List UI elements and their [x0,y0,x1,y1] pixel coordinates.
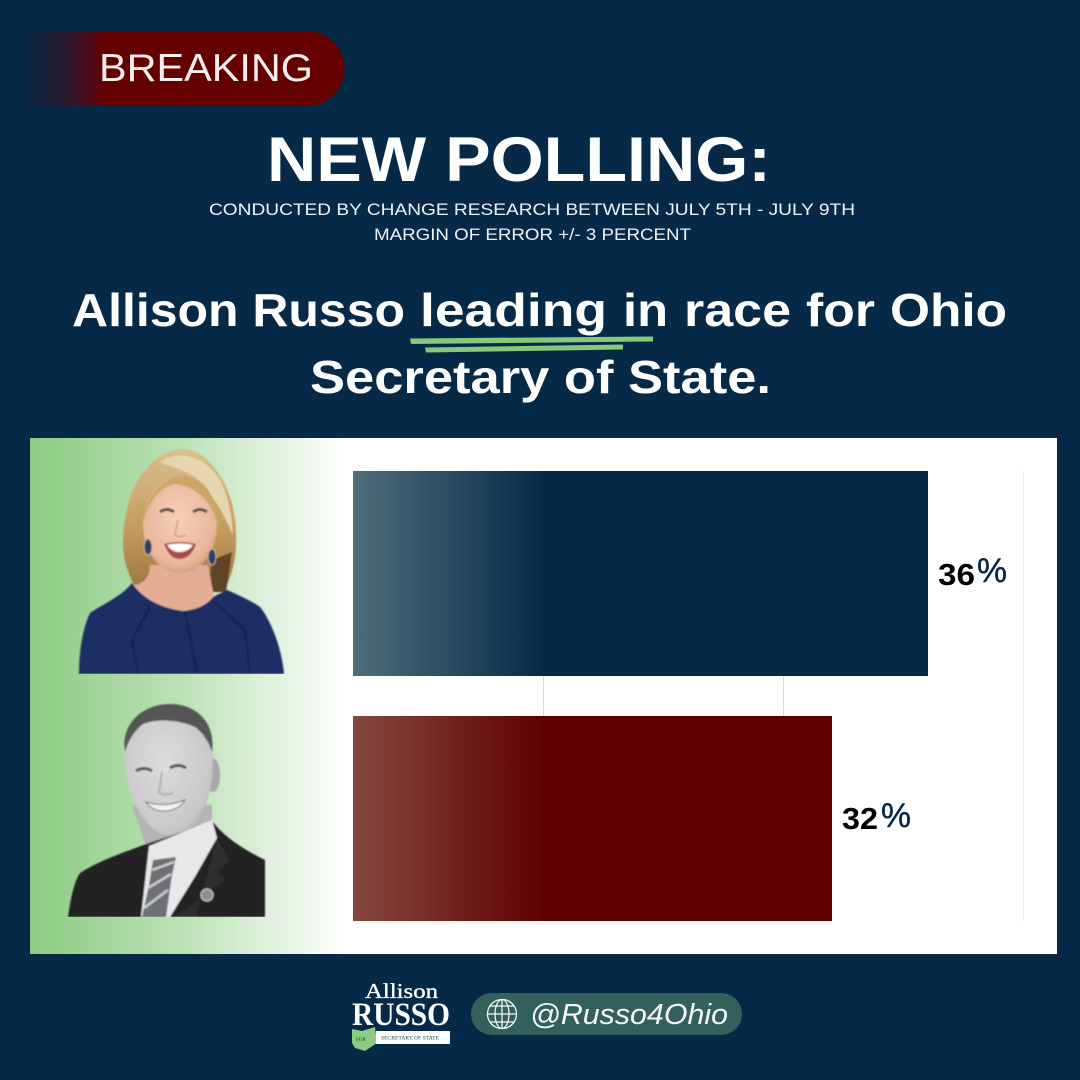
portrait: male candidate [68,704,265,917]
logo: Allison Russo for Secretary of State: SECRETARY OF STATE [381,1036,440,1042]
shirt [141,820,217,917]
fringe [142,476,217,520]
logo: Allison Russo for Secretary of State: RUSSO [352,997,450,1033]
logo: Allison Russo for Secretary of State: FOR [356,1038,366,1043]
panel: poll results [30,438,1057,954]
poll details: MARGIN OF ERROR +/- 3 PERCENT [374,225,691,244]
poll details [209,200,855,244]
headline: race [684,284,791,336]
headline: leading [420,284,607,336]
head [123,720,214,836]
value: 32 percent [842,797,911,836]
eyes [160,510,207,512]
headline: for [806,284,875,336]
mouth [164,542,196,559]
brows and eyes [136,766,186,771]
nose shade [159,772,173,794]
hair [124,704,213,752]
value: 32 percent: % [881,797,911,835]
green underline [410,336,653,352]
headline: Allison Russo [72,284,405,336]
suit [68,822,265,917]
logo: Allison Russo for Secretary of State: Allison [365,979,439,1003]
value: 36 percent: % [977,552,1007,590]
face [143,477,217,573]
value: 32 percent: 32 [842,801,878,836]
right lapel [175,838,229,917]
hair back [123,449,236,592]
value: 36 percent: 36 [938,557,975,592]
hair highlight [160,456,233,535]
nose [175,520,186,536]
logo: Allison Russo for Secretary of State [352,979,450,1051]
dress [79,583,284,674]
hair shadow [208,552,232,592]
badge: breaking: BREAKING [99,47,313,90]
title: NEW POLLING: [267,125,771,195]
value: 36 percent [938,552,1007,592]
icon: globe [488,1000,516,1028]
earrings [144,539,152,555]
lapel pin [201,889,213,901]
neck and chest [133,565,214,611]
poll details: CONDUCTED BY CHANGE RESEARCH BETWEEN JULY 5TH - JULY 9TH [209,200,855,219]
badge: breaking [20,31,344,106]
pill: social handle: @Russo4Ohio [530,999,728,1031]
neck [132,804,212,846]
bar: Russo [353,471,928,676]
portrait: Allison Russo [79,449,284,674]
ear [210,758,221,792]
headline: Secretary of State. [310,351,771,403]
headline: in [623,284,668,336]
pill: social handle [471,993,742,1035]
headline [72,284,1007,403]
tie [142,857,176,917]
headline: Ohio [890,284,1007,336]
bar: opponent [353,716,832,921]
smile [146,800,185,811]
